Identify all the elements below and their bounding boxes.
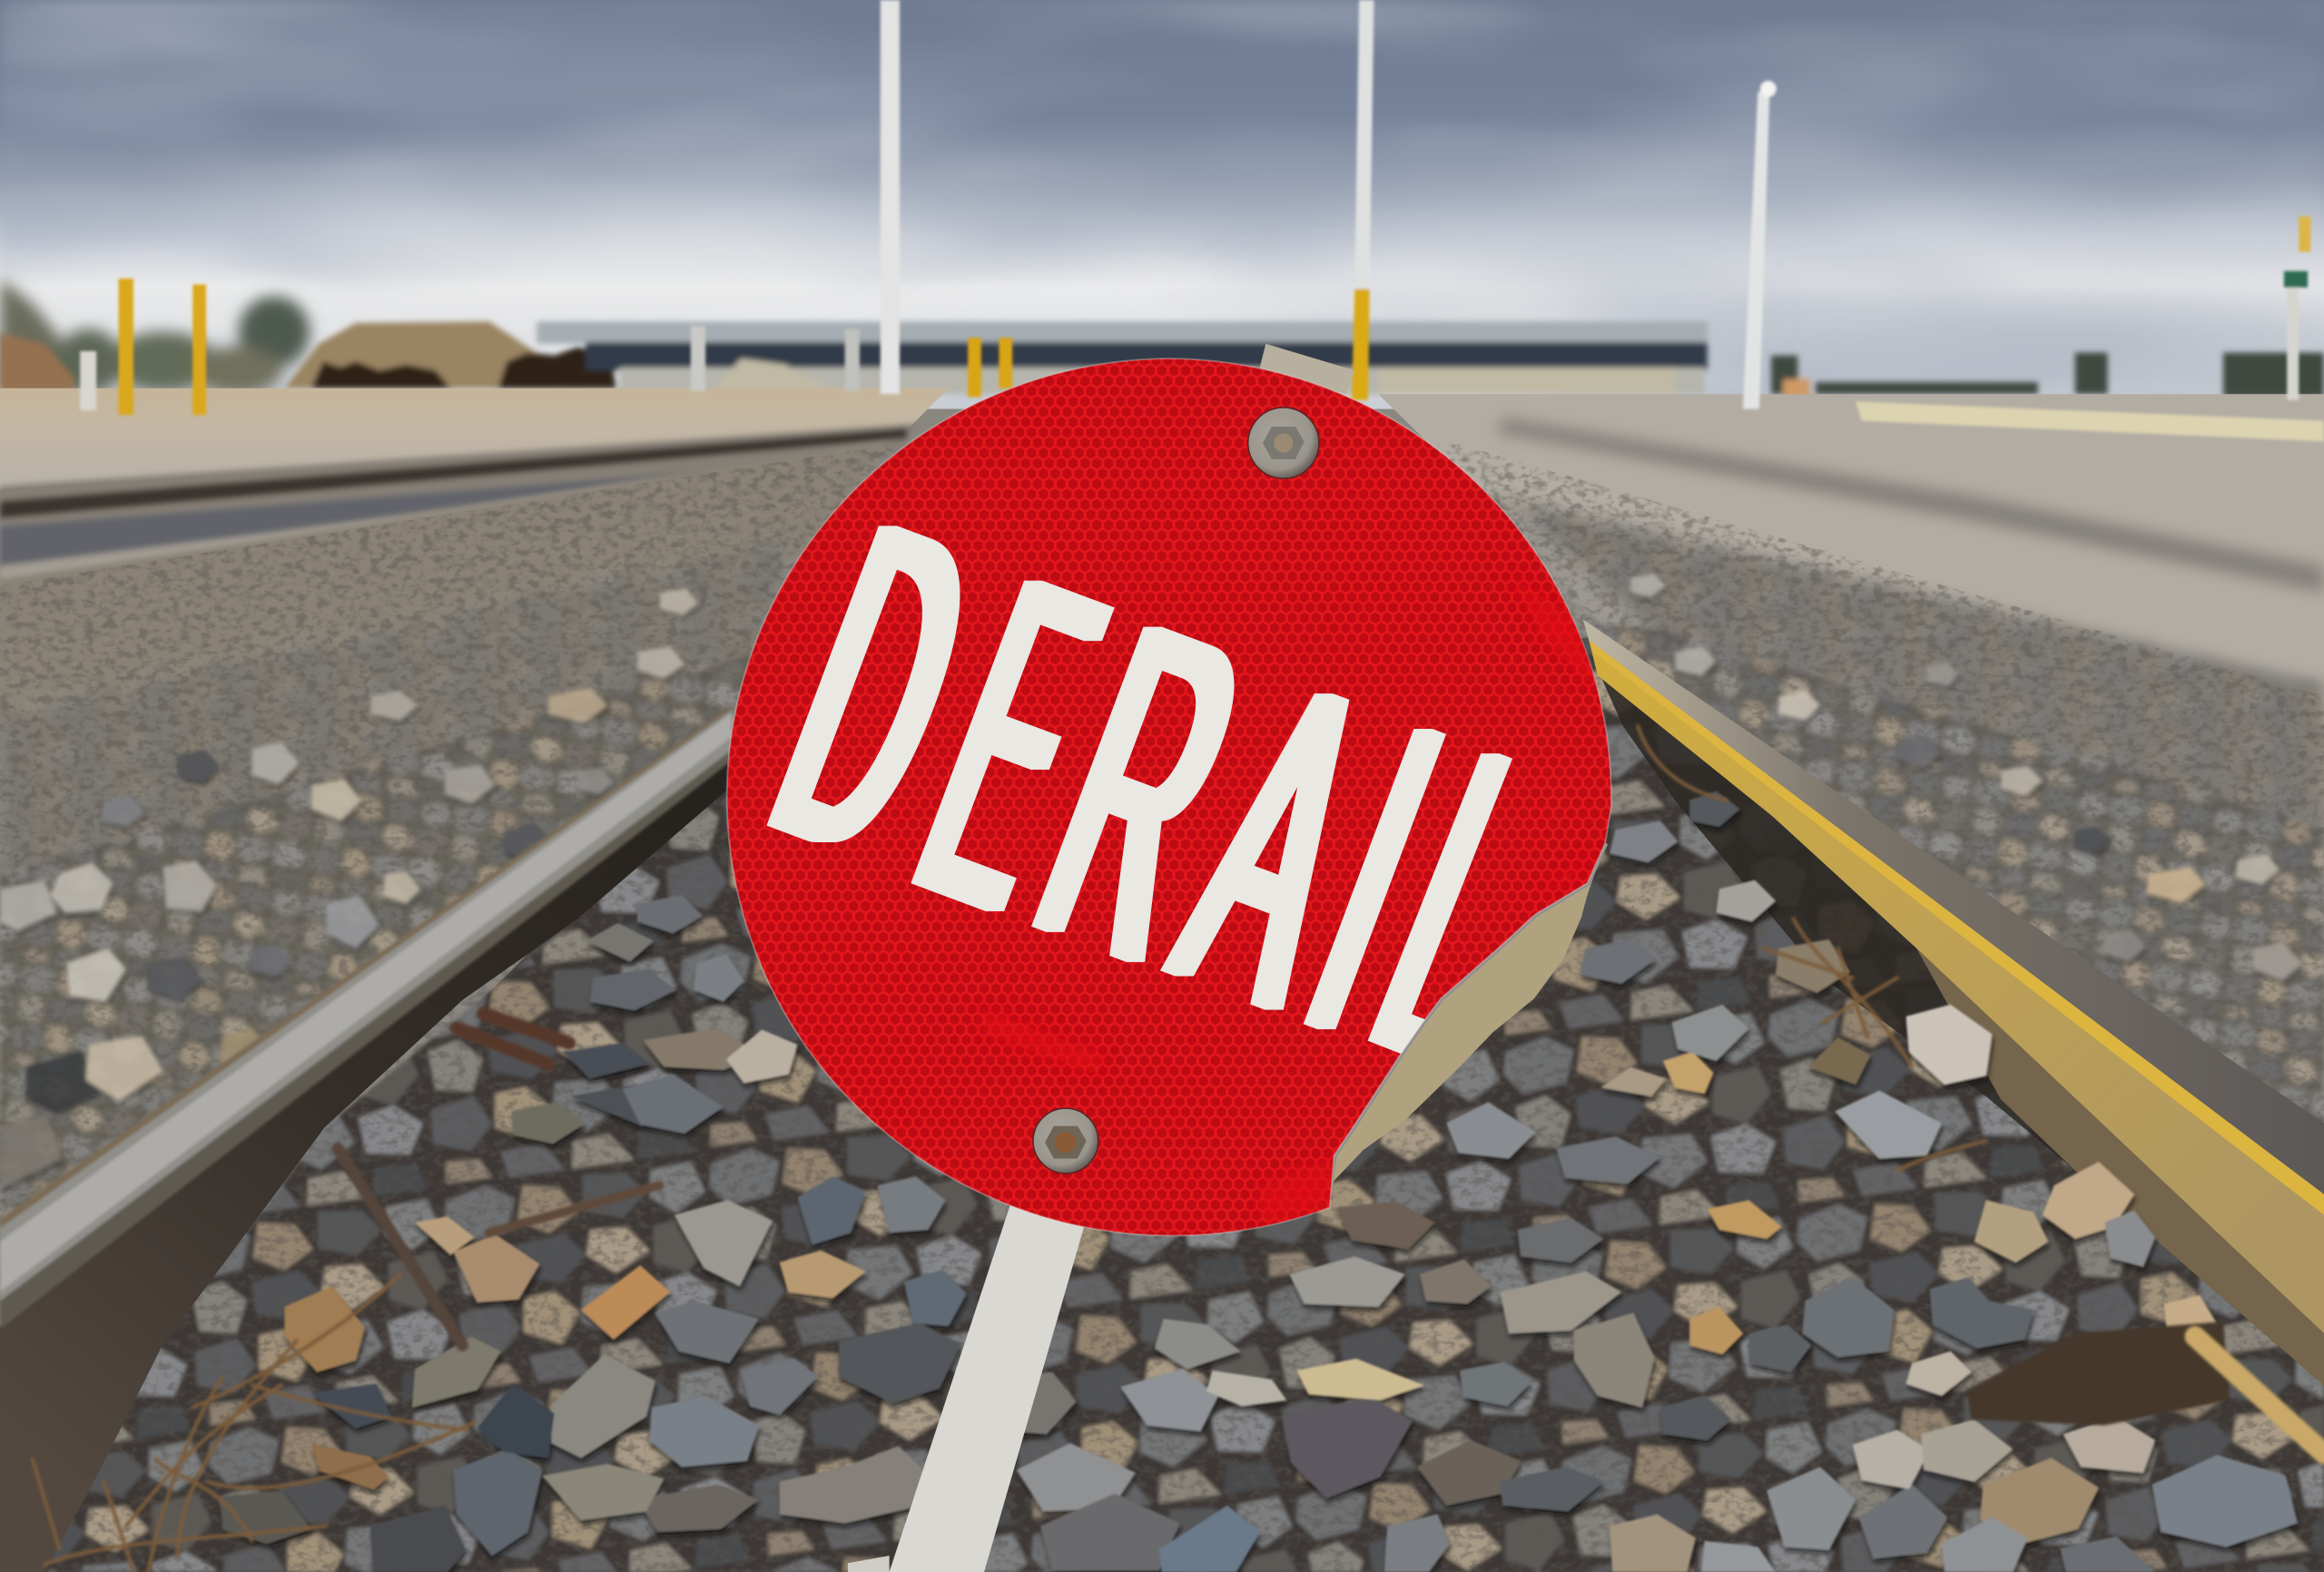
mid gravel texture left xyxy=(0,652,752,1214)
sky with clouds xyxy=(0,0,2324,409)
mid gravel texture right xyxy=(1589,621,2324,1124)
right ballast bed base xyxy=(1482,489,2324,1141)
far gravel texture right xyxy=(1524,505,2324,830)
sign text DERAIL: I xyxy=(1264,632,1486,1126)
poles and bollards xyxy=(80,0,2310,415)
sign text DERAIL: A xyxy=(1135,585,1420,1102)
top bolt xyxy=(1248,408,1319,478)
far ground right road xyxy=(1378,394,2324,726)
central ballast stones xyxy=(222,791,2298,1572)
red sign face xyxy=(727,359,1611,1235)
right rail shadow gap xyxy=(1598,670,2324,1385)
dry grass, twigs and rusty debris xyxy=(33,726,2324,1572)
backing of torn corner xyxy=(1328,839,1607,1200)
far left track xyxy=(0,424,919,593)
distant landscape: mound and warehouse xyxy=(0,321,2324,406)
bracket tab above sign xyxy=(1260,344,1354,394)
sign text DERAIL xyxy=(728,427,1593,1156)
left rail head xyxy=(0,705,733,1329)
left side stones xyxy=(0,588,698,1188)
right rail head xyxy=(1583,619,2324,1194)
distant trees xyxy=(0,279,310,394)
right side stones xyxy=(1630,574,2303,981)
near gravel texture xyxy=(45,635,2324,1572)
left rail web and shadow xyxy=(0,756,729,1572)
bottom bolt xyxy=(1033,1108,1098,1174)
left ballast bed base xyxy=(0,536,793,1230)
sign post xyxy=(890,1204,1085,1572)
sign text DERAIL: E xyxy=(873,482,1149,1007)
right rail web in shade xyxy=(1916,948,2324,1385)
fine gravel grit over the ground xyxy=(0,445,2324,1572)
torn edge highlight xyxy=(1328,843,1605,1197)
sign text DERAIL: D xyxy=(728,427,1022,956)
sign text DERAIL: L xyxy=(1330,659,1593,1156)
central ballast bed base xyxy=(0,637,2324,1572)
road dark band xyxy=(1497,418,2324,593)
far ground left xyxy=(0,388,949,489)
post base plate xyxy=(848,1556,890,1572)
sign text DERAIL: R xyxy=(992,526,1291,1057)
far gravel texture left xyxy=(0,536,792,875)
right rail yellow highlight xyxy=(1589,640,2324,1215)
bright scuff marks xyxy=(979,575,1604,1227)
wooden sleeper on the right xyxy=(1967,1321,2230,1425)
derail sign xyxy=(727,359,1611,1235)
right rail yellow side xyxy=(1589,640,2324,1333)
mid ground left xyxy=(0,441,890,733)
far kerb xyxy=(1856,401,2324,441)
